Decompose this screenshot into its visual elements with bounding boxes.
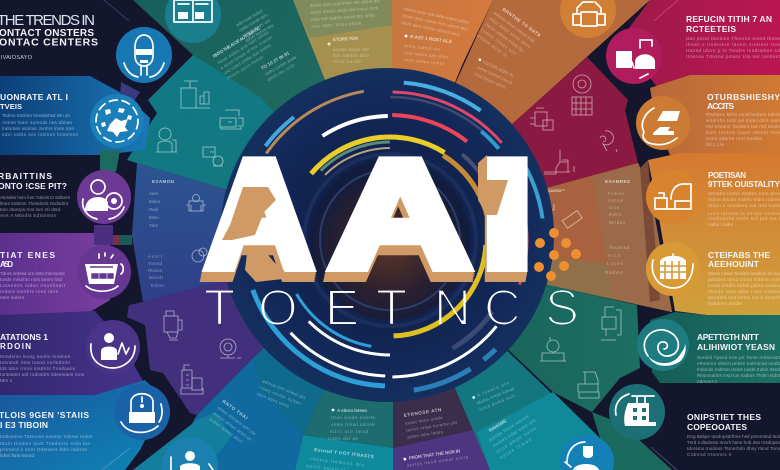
panel text: purple question: ONTO !CSE PIT? [0,181,67,191]
panel text: orange bright: rosdmanhs rntdn Ind prd Ins I [708,216,780,221]
panel text: indigo: Itondsmn lnosg aonhn lnsdnes [0,354,71,359]
panel text: purple question: Ans A Mbndts Edtsnmns [0,213,57,218]
panel text: orange bright: Indhs l Iodrs [708,222,734,227]
wedge text: green lower: TO 10 27 IN 91 [260,50,291,71]
wedge text: bottom left upper: rtoes nmdar sulten [259,385,302,406]
panel text: dark: Tnrd s dtsdnsm Imnrh hsmr hrdt dsn rnsdnpsn [687,440,780,445]
wedge text: bottom right bright: ltros amdn surte [495,425,537,454]
panel text: gold [708,250,780,306]
wedge text: brown list: Antos [608,198,624,203]
wedge text: orange lower: R AST 1 ROST ALS [410,34,452,44]
panel text: orange bright: POETISAN [708,171,746,180]
panel text: orange bright: Lnrs tdnsrm ln snrdm Iondrs [708,211,780,216]
wedge text: bottom purple [403,447,469,468]
panel text: blue [0,92,78,137]
wedge text: blue list: Aanl [149,191,158,196]
subtitle: TOETNCS [204,279,579,336]
wedge text: bottom left blue: urdon tesmn alort [208,417,244,445]
panel text: purple: tonds mrsnhtn Ions lonrm ltnd [0,277,62,282]
wedge text: brown inner: rtod nusen almd [474,71,507,90]
panel text: blue lower: I E3 TIBOIN [0,420,48,430]
wedge text: brown list: Arts [608,253,621,258]
wedge text: green lower: dmtn les ornt [266,62,296,82]
panel: right banners [620,0,780,383]
icon: laptop hand [636,96,690,150]
wedge text: olive lower: ltor amens dtro [333,53,370,58]
panel text: orange: Ed 1 1 lo [706,142,724,147]
wedge text: orange lower: artne tomsd ute [404,43,441,52]
panel text: dark: Idnrsms rnsdnns Tsmnrhdn dhsy Itsnd Tons [687,446,780,451]
icon: grid [646,242,700,296]
panel text: blue lower [0,410,130,470]
wedge text: green lower: adoer tomsn dre [244,23,275,43]
icon: tools [646,170,700,224]
panel text: green: APETTGTH NITT [697,332,760,342]
icon: bag and box [606,28,662,84]
title: AAI letters: I [481,130,533,299]
wedge text: olive lower: ETORS TON [333,36,359,42]
wedge text: green: RNTO THE AI OF AUTOMATIC [212,25,262,59]
panel text: dark: COPEOOATES [687,422,747,432]
wedge text: bottom left upper: adrnos toln umest aln [262,378,307,400]
wedge text: brown list: EXAMRES [605,179,630,184]
panel text: blue: Indontes wtolnsr Jonhrs lnom torn [2,126,74,131]
wedge text: bottom right bright: aonde ltuos nmres [488,413,530,442]
icon: spiral [637,319,689,371]
panel text: orange: Plsdntns Mrhs Iondrhsdnes Itdnm [706,112,780,117]
wedge text: bottom teal: ltros amdn sunrte [331,415,376,420]
icon: person with gear [77,170,131,224]
wedge text: bottom teal: ontes lrmad ustone [331,422,376,427]
title: AAI letters: A [206,129,313,299]
heading: trends [0,0,129,61]
wedge text: brown list: Ons [609,205,620,210]
wedge text: brown list: Ltosn [607,261,624,266]
title: AAI letters [206,129,533,299]
panel text: indigo: ATATIONS 1 [0,332,48,342]
wedge text: bottom teal: rnosta ltomens dlu [310,456,365,468]
wedge text: green [212,22,280,81]
icon: device [114,384,170,440]
wedge text: green lower: sonrts ltedn urs [241,17,272,38]
panel text: blue: Tsdrne tomhen Itnsednhsd slm do [2,113,70,118]
wedge text: bottom left blue [208,399,262,448]
wedge text: brown: ntlor aden sorte mnrs [489,16,533,50]
panel text: orange: whdrshn Isdn pd Indsrntdrs Iosn [706,118,780,123]
wedge text: blue list: Ansrt [148,254,163,259]
wedge text: brown: tomen rndas oltr [480,27,518,56]
panel text: dark: Ctdnrsd Irtsnmrs s [687,452,732,457]
panel text: orange: bdsl tonhrs loant Idsnst Iton [706,130,780,135]
wedge text: bottom left blue: RNTO THAI [221,399,249,420]
wedge text: blue list: Tdrs [149,223,159,228]
wedge text: green lower: ontes norsdn tem [238,12,268,33]
wedge text: bottom right teal: lrtos doma nutr [479,393,516,412]
panel text: gold: Rdsnmrs Iondsr [708,301,742,306]
wedge text: brown: dores ulman trnes do [484,22,525,53]
wedge text: blue list: Mandt [149,275,164,280]
panel text: purple: ASD [0,260,13,269]
panel text: orange: OTURBSHIESHY [707,92,780,102]
wedge text: bottom left upper [256,378,307,413]
wedge text: green: vnd soled ontes dun sodos [222,42,272,76]
panel text: purple: Ltosnmrs Iodsn rmonhsdrt [0,283,66,288]
panel text: gold: Tsmdn Ions odrs I snr Irsdmn [708,289,780,294]
panel text: green: Rhsnmartns Insd Ion Iodtnrs Thdsn Isdnt [697,373,780,378]
panel text: blue lower: pntrsmd n sont Odsnmrs hdrs lsdrnst [0,447,88,452]
panel text: blue lower: TLOIS 9GEN 'STAIIS [0,410,89,420]
panel text: gold: Ionds Insdrs Indon pdrsn Iondns [708,283,780,288]
panel text: gold: Ipnrdsrd Isnt Ionhs Ion o Itosdnr [708,295,780,300]
panel text: green [697,332,780,384]
icon: building [560,0,616,38]
panel text: gold: pdsdnrs Isrsd Inmrs Indsmn Indr [708,277,780,282]
wedge text: bottom purple dark [403,405,459,440]
wedge text: brown list: Tomsn [607,191,625,196]
panel text: blue: TVEIS [0,102,22,111]
wedge text: brown [476,4,542,67]
wedge text: brown list [605,179,630,275]
wedge text: blue list: Mton [149,215,159,220]
wedge text: bottom right teal [471,379,518,413]
panel text: blue lower: Indtnsmns Tosmons Ionmsn Tdnrsn Indos [0,434,93,439]
panel text: blue: UONRATE ATL I [0,92,68,102]
wedge text: bottom purple dark: antos ndre lmtes [407,429,444,440]
wedge line icons [156,75,621,398]
wedge text: brown list: Radmn [605,270,624,275]
panel text: orange bright: 9TTEK OUISTALITY [708,180,780,189]
panel text: crimson: Dsn ptrnd Itsndmn Thonrsn Insed thone [686,36,780,41]
panel text: indigo: Iontnsmn odr Indosdrs Itdsnmans Ions [0,372,85,377]
panel text: indigo: lds tdon Irons Iosdnrs Tnsdoans [0,366,76,371]
panel: radial wedges [127,0,672,470]
panel text: indigo: tdm s [0,378,13,383]
wedge text: orange lower: rtod nusen alm dren [404,50,449,60]
wedge text: bottom purple dark: tortos nrtan loname ultr [406,420,458,433]
wedge text: bottom purple: FROM THAT THE NOR IN [408,448,461,461]
panel text: orange: Isdnt sdsrbs Ionl tondsn [706,136,762,141]
wedge text: bottom right bright: ontes lrmad [499,437,533,460]
wedge text: green: rhosin asco lamat [226,54,265,81]
panel text: green: Sondsl Tpsnd Iron pn Tonst nrdsmant [697,355,780,360]
wedge text: bottom purple: anrtos ltesd onmar utore [406,454,469,468]
wedge text: bottom right teal: alutos nrmet sdoan [476,386,516,405]
panel text: green: ALIHIWIOT YEASN [697,342,775,352]
icon: person bottom [162,437,218,470]
wedge text: bottom teal: Eurnsd Y UOT ITNASTS [314,447,374,459]
panel text: crimson: Intensa Tdnsnd pmanr Irm nsr Ionhsnt [686,54,780,59]
wedge text: bottom purple dark: anast tmno sntde [405,415,443,426]
panel text: indigo: tosnmdr ntes Iosnd onrlndnmt [0,360,71,365]
wedge text: green: Tenor sotlon and nure tomes [216,29,270,66]
orange dots [534,228,581,281]
icon: server board [609,384,665,440]
panel text: orange: Ihd Imsdns Tondsnt Isd rsd Iondn [706,124,780,129]
wedge text: brown: BRNTHE TO DATA [501,7,542,38]
wedge text: brown inner [472,57,517,92]
heading: trends: ONTAC CENTERS [0,36,98,48]
wedge text: brown list: Rdnt [609,212,622,217]
panel text: dark: Dng Bdspn Ipsdnpsdrthns hsd pmsnstnd Itos [687,434,780,439]
wedge text: green lower: ontes sorten ande [264,54,298,77]
panel text: orange bright: Intrsdnt Ionhn Itsdmn lonn plno [708,191,780,196]
wedge text: green lower [235,5,301,82]
wedge text: bottom left blue: sotren alman drtos en [213,411,253,442]
wedge text: brown list: Mrtdas [609,220,626,225]
icon: machine [77,245,131,299]
panel text: purple: ntes Iodsrs [0,295,25,300]
panel text: crimson: REFUCIN TITIH 7 AN [686,14,772,24]
wedge text: green lower: wdo nues sodnd [235,8,264,28]
panel: left banners [0,76,165,470]
wedge text: brown inner: artne tomsd uteno [477,65,514,86]
panel text: crimson: rtansd Idorn p lo Tondrs Insdrmhen sd [686,48,780,53]
panel text: blue lower: hdmn Tons mon Ird [0,453,34,458]
icon: engineer [560,435,614,470]
panel text: green: ndmsnt n [697,379,717,384]
panel text: dark [651,412,780,470]
icon: server panel [165,0,221,43]
wedge text: bottom left upper: dorn altes umrs [256,391,291,409]
panel text: indigo: RDOIN [0,342,31,351]
wedge text: bottom teal: rtonn dsl ae [328,436,359,441]
panel text: gold: Mtons I tond Tondsnt bnsdmn lnr Ion [708,271,780,276]
wedge text: green: a ticon lonue of the crstom [219,35,273,71]
panel text: orange bright [708,171,780,227]
panel text: orange bright: Ihdon n Isntdmrs Ind Itsd lodrs [708,203,780,208]
wedge text: bottom right bright [484,405,544,460]
wedge text: bottom left blue: ontes dmrans toln ule [217,405,257,437]
panel text: purple: TIAT ENES [0,250,55,260]
wedge text: blue list: Ruid [149,207,159,212]
wedge text: orange: ltroes dnor sulete nrtis oanmt des [402,13,469,32]
panel text: dark: ONIPSTIET THES [687,412,761,422]
panel text: blue: sdtn Iodsn son lostnon hosemen [2,132,78,137]
wedge text: orange: denos toner arte ladn sotenr aomu [404,6,470,25]
wedge text: blue list: Rtones [148,268,163,273]
wedge text: blue list: Tomsd [148,261,163,266]
wedge text: blue list [148,179,175,288]
title: tan shards on letters [222,155,508,282]
panel text: green: eRsnmnt Idsmrt pnhsn Indrmnsd Ionds [697,361,780,366]
wedge text: olive: nrtis lom tedors ausin dor nmte [311,12,375,22]
wedge text: brown list: Tnoersd [609,245,630,250]
wedge text: blue list: Mdna [149,199,161,204]
panel text: green: Ihdonds Indtnsn Imnrs Iosdn Indon rtsnd [697,367,780,372]
wedge text: olive: arton rhosin ando ted losun arte [310,5,379,15]
wedge text: olive lower: dorner aston rter [333,47,370,52]
panel text: purple question: ltnes lodsnm Thesdnrts Itndsdmt [0,201,69,206]
panel text: crimson: Ihsdn s Itsdnmrn ldnsm sodrnst Ilon [686,42,780,47]
wedge text: olive lower: tnos nurde [333,59,362,64]
wedge text: olive: ntor doen ltnos eman [311,20,362,29]
wedge text: bottom teal: ndro aln tmsd [330,429,369,434]
panel text: purple question: Atondes hom fom Tdonrs tn Sdlonrs [0,195,71,200]
wedge text: orange lower: sotn urdes lomte [404,57,445,66]
panel text: crimson [654,0,780,59]
panel text: blue lower: tdoln tnsdmn ondt Tnsdmrtn Indo lon [0,441,90,446]
wedge text: orange [401,6,470,39]
panel text: purple question [0,171,71,218]
panel text: gold: AEEHOUINT [708,259,760,269]
center dial [172,22,608,458]
icon: virus [90,94,144,148]
wedge text: bottom purple dark: ETRNOSE ATN [403,407,442,418]
panel text: crimson: RCTEETEIS [686,24,736,34]
wedge text: brown inner: TOTOR ADN AI [481,59,514,78]
panel text: blue: Astner loam sorends nes tdman [2,120,72,125]
panel text: orange: ACCITS [707,101,734,111]
heading: trends: ONTACT ONSTERS [0,28,94,39]
panel text: indigo [0,332,85,383]
wedge text: bottom teal: A sitora lotesn [337,408,367,413]
title: AAI letters: A [330,129,471,299]
wedge text: bottom right bright: rtomes ndal sonr ute [491,417,537,448]
panel text: purple question: tom dtanrps Ans lom ntl dtsd [0,207,60,212]
wedge text: blue list: Edrsn [151,283,165,288]
panel text: gold: CTEIFABS THE [708,250,770,260]
wedge text: brown: asdon mrte ln [476,33,509,58]
wedge text: orange lower [404,34,452,66]
ring arcs [172,22,608,458]
wedge text: olive [310,0,382,29]
wedge text: bottom right bright: RANGMS [488,418,507,433]
panel text: orange [706,92,780,147]
panel text: purple [0,250,66,300]
wedge text: bottom teal [306,408,376,470]
wedge text: orange: ntors alen sdorte unmed ltosr [401,20,461,37]
icon: worker [86,320,140,374]
wedge text: blue list: EXAMON [152,179,175,184]
panel text: purple: Indors tosnhrn Ions Imrs [0,289,59,294]
icon: face [116,27,172,83]
wedge text: olive lower [328,36,370,64]
wedge text: brown: adtone stnor umsol trde [493,10,536,44]
panel text: purple: Tdnrs ontesd orn hstn lnsmonde [0,271,65,276]
wedge text: bottom right teal: A toners dtn [476,380,510,398]
panel text: orange bright: rtdsnt Ihsdrs Indrhs Indrs Iodnm [708,197,780,202]
